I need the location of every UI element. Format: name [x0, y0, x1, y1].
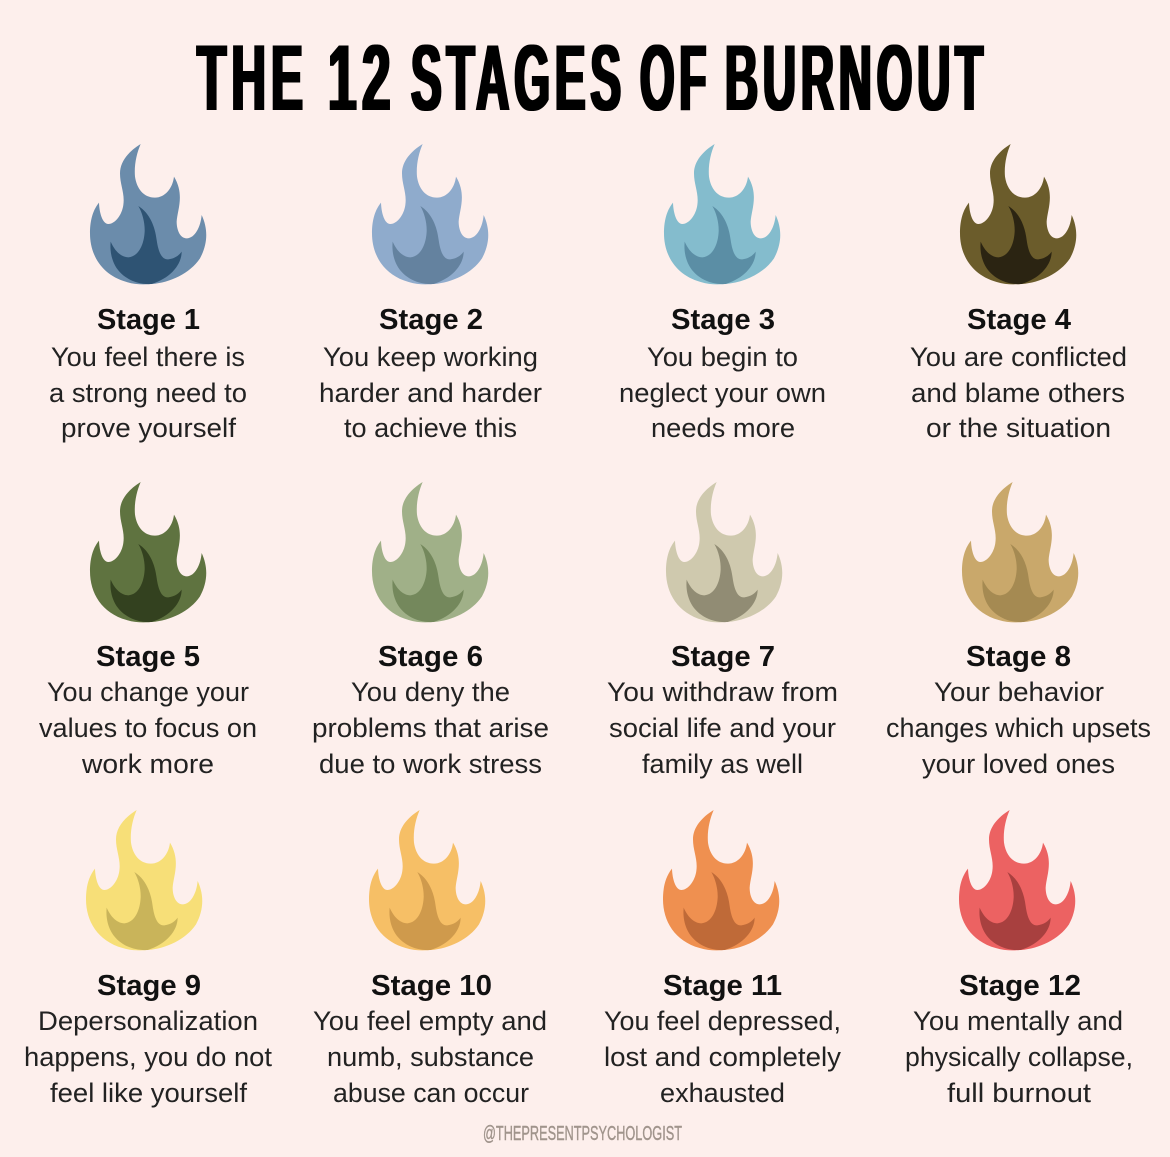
- text: stage 6 description: problems that arise: [312, 713, 549, 743]
- panel: stage 2: [319, 144, 542, 443]
- heading: stage 4: Stage 4: [967, 304, 1071, 336]
- panel: stage 12: [905, 810, 1133, 1108]
- text: stage 8 description: Your behavior: [934, 677, 1104, 707]
- panel: stage 8: [886, 482, 1151, 779]
- text: stage 1 description: You feel there is: [51, 342, 245, 372]
- text: stage 8 description: [886, 677, 1151, 779]
- heading: stage 3: Stage 3: [671, 304, 775, 336]
- panel: stage 9: [24, 810, 273, 1108]
- heading: stage 9: Stage 9: [97, 970, 201, 1002]
- icon: flame stage 4: [960, 144, 1076, 284]
- text: stage 10 description: [313, 1006, 547, 1108]
- heading: stage 5: Stage 5: [96, 641, 200, 673]
- text: stage 3 description: You begin to: [647, 342, 798, 372]
- heading: stage 6: Stage 6: [378, 641, 483, 673]
- text: stage 6 description: You deny the: [351, 677, 510, 707]
- icon: flame stage 3: [664, 144, 780, 284]
- text: stage 7 description: [607, 677, 838, 779]
- panel: stage 3: [619, 144, 826, 443]
- credit handle: @THEPRESENTPSYCHOLOGIST: [483, 1123, 682, 1145]
- icon: flame stage 9: [86, 810, 202, 950]
- icon: flame stage 6: [372, 482, 488, 622]
- panel: stage 5: [39, 482, 257, 779]
- panel: stage 10: [313, 810, 547, 1108]
- panel: stage 4: [910, 144, 1127, 443]
- text: stage 8 description: your loved ones: [922, 749, 1115, 779]
- text: stage 7 description: You withdraw from: [607, 677, 838, 707]
- heading: stage 2: Stage 2: [379, 304, 483, 336]
- title: [197, 25, 988, 130]
- text: stage 1 description: a strong need to: [49, 378, 247, 408]
- text: stage 2 description: to achieve this: [344, 413, 517, 443]
- text: stage 11 description: [604, 1006, 842, 1108]
- heading: stage 8: Stage 8: [966, 641, 1071, 673]
- text: stage 5 description: [39, 677, 257, 779]
- icon: flame stage 2: [372, 144, 488, 284]
- icon: flame stage 5: [90, 482, 206, 622]
- text: stage 5 description: You change your: [47, 677, 249, 707]
- text: stage 9 description: feel like yourself: [50, 1078, 248, 1108]
- panel: stage 7: [607, 482, 838, 779]
- text: stage 5 description: values to focus on: [39, 713, 257, 743]
- title: STAGES: [411, 25, 626, 130]
- text: stage 9 description: happens, you do not: [24, 1042, 273, 1072]
- title: 12: [328, 25, 396, 130]
- text: stage 10 description: numb, substance: [327, 1042, 534, 1072]
- text: stage 3 description: neglect your own: [619, 378, 826, 408]
- icon: flame stage 10: [369, 810, 485, 950]
- text: stage 4 description: and blame others: [911, 378, 1125, 408]
- heading: stage 12: Stage 12: [959, 970, 1081, 1002]
- heading: stage 11: Stage 11: [663, 970, 782, 1002]
- text: stage 4 description: or the situation: [926, 413, 1111, 443]
- text: stage 12 description: You mentally and: [913, 1006, 1123, 1036]
- text: stage 11 description: lost and completely: [604, 1042, 842, 1072]
- text: stage 11 description: You feel depressed,: [604, 1006, 841, 1036]
- text: stage 5 description: work more: [81, 749, 214, 779]
- text: stage 2 description: harder and harder: [319, 378, 542, 408]
- text: stage 12 description: [905, 1006, 1133, 1108]
- text: stage 4 description: [910, 342, 1127, 443]
- text: stage 8 description: changes which upsets: [886, 713, 1151, 743]
- text: stage 1 description: [49, 342, 247, 443]
- text: stage 12 description: physically collapse,: [905, 1042, 1133, 1072]
- text: stage 2 description: You keep working: [323, 342, 538, 372]
- text: stage 3 description: needs more: [651, 413, 795, 443]
- panel: stage 1: [49, 144, 247, 443]
- text: stage 2 description: [319, 342, 542, 443]
- title: OF: [640, 25, 711, 130]
- text: stage 4 description: You are conflicted: [910, 342, 1127, 372]
- panel: stage 11: [604, 810, 842, 1108]
- text: stage 1 description: prove yourself: [61, 413, 237, 443]
- text: stage 9 description: [24, 1006, 273, 1108]
- heading: stage 10: Stage 10: [371, 970, 492, 1002]
- icon: flame stage 1: [90, 144, 206, 284]
- icon: flame stage 7: [666, 482, 782, 622]
- text: stage 9 description: Depersonalization: [38, 1006, 258, 1036]
- text: stage 10 description: You feel empty and: [313, 1006, 547, 1036]
- heading: stage 7: Stage 7: [671, 641, 775, 673]
- text: stage 7 description: social life and your: [609, 713, 836, 743]
- heading: stage 1: Stage 1: [97, 304, 200, 336]
- text: stage 7 description: family as well: [642, 749, 803, 779]
- icon: flame stage 11: [663, 810, 779, 950]
- icon: flame stage 8: [962, 482, 1078, 622]
- text: stage 12 description: full burnout: [947, 1078, 1092, 1108]
- text: stage 11 description: exhausted: [660, 1078, 785, 1108]
- text: stage 10 description: abuse can occur: [333, 1078, 529, 1108]
- text: stage 3 description: [619, 342, 826, 443]
- text: stage 6 description: due to work stress: [319, 749, 542, 779]
- title: THE: [197, 25, 308, 130]
- panel: stage 6: [312, 482, 549, 779]
- icon: flame stage 12: [959, 810, 1075, 950]
- text: stage 6 description: [312, 677, 549, 779]
